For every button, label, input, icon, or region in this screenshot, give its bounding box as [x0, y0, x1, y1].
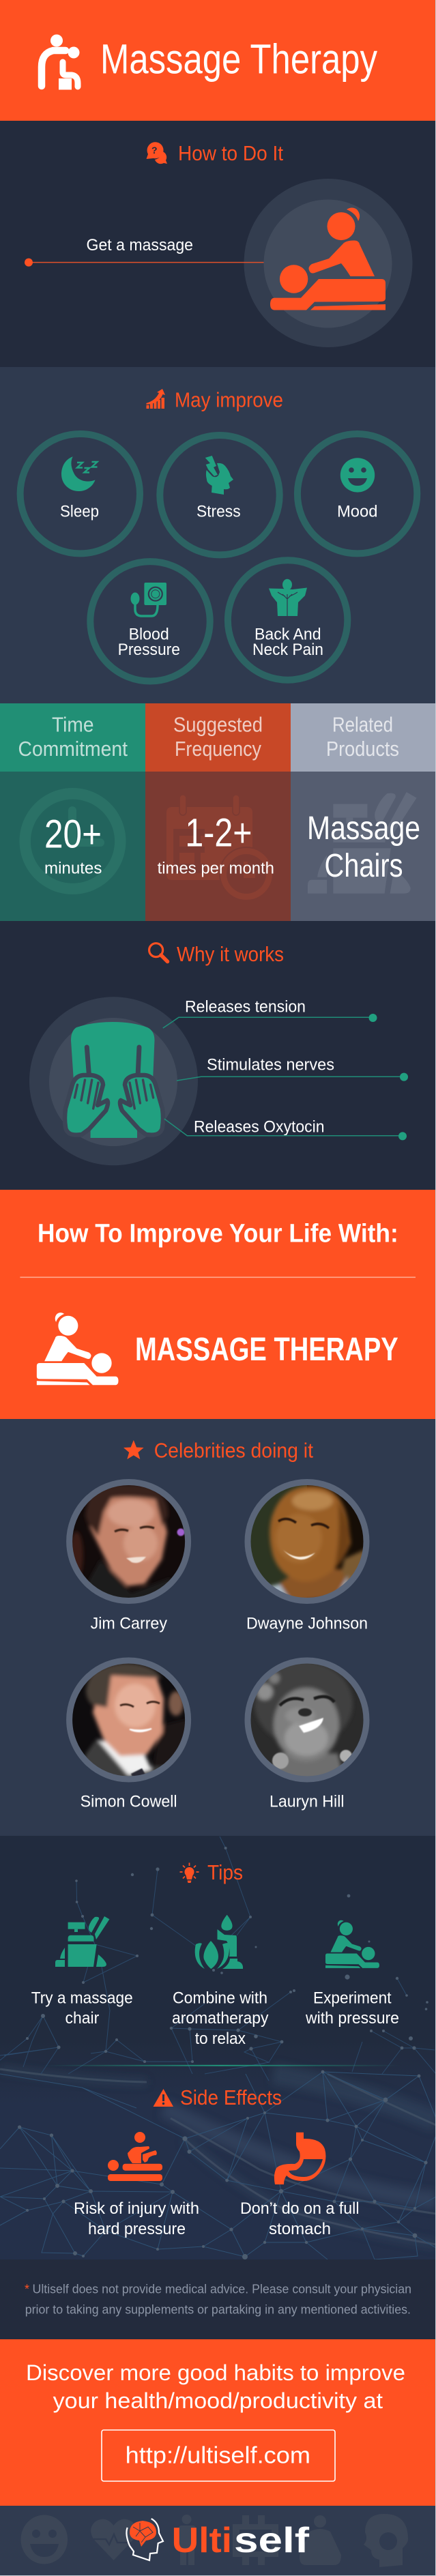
icon: massage white — [37, 1313, 119, 1385]
side effect: risk of injury: hard pressure — [88, 2220, 186, 2238]
heading: tips: Tips — [207, 1860, 243, 1884]
tip: experiment with pressure: with pressure — [305, 2009, 399, 2028]
title: Massage Therapy — [100, 35, 377, 82]
value: 20+ minutes — [44, 813, 102, 878]
value: 1-2+ times per month — [158, 811, 274, 878]
label: lauryn hill: Lauryn Hill — [270, 1793, 344, 1811]
panel: title banner — [0, 0, 436, 121]
portrait: jim carrey — [68, 1480, 191, 1603]
tip: combine with aromatherapy: to relax — [195, 2030, 246, 2048]
label: simon cowell: Simon Cowell — [81, 1793, 177, 1811]
tip: try a massage chair: chair — [66, 2009, 99, 2028]
value: 1-2+ times per month: times per month — [158, 860, 274, 878]
item: blood pressure: Pressure — [118, 641, 180, 659]
label: jim carrey: Jim Carrey — [91, 1615, 168, 1633]
icon: massage small — [325, 1920, 379, 1968]
item: blood pressure — [90, 561, 210, 681]
icon: star — [123, 1440, 144, 1459]
item: back and neck pain — [228, 560, 347, 680]
callout: get a massage: Get a massage — [86, 236, 193, 254]
panel: celebrities — [0, 1419, 436, 1836]
heading: side effects: Side Effects — [180, 2085, 282, 2109]
item: back and neck pain: Neck Pain — [252, 641, 323, 659]
logo: wordmark: Ulti — [172, 2521, 232, 2560]
icon: massage chair watermark — [308, 792, 417, 894]
panel: call to action — [0, 2339, 436, 2506]
icon: magnifier — [149, 943, 168, 962]
logo: wordmark: self — [234, 2521, 310, 2560]
link button — [102, 2430, 335, 2481]
icon: aromatherapy candle and lotus — [195, 1915, 243, 1969]
heading: celebrities doing it: Celebrities doing it — [154, 1438, 313, 1463]
tip: try a massage chair — [31, 1989, 133, 2028]
value: massage chairs: Massage — [307, 810, 420, 847]
panel: suggested frequency — [145, 703, 291, 921]
disclaimer text — [25, 2283, 411, 2317]
heading: related products — [326, 713, 399, 761]
link button: http://ultiself.com — [126, 2443, 310, 2469]
item: mood: Mood — [337, 503, 378, 521]
disclaimer text: * — [25, 2283, 29, 2296]
heading: time commitment: Time — [52, 713, 94, 737]
panel: tips and side effects — [0, 1836, 436, 2259]
tip: combine with aromatherapy: Combine with — [173, 1989, 267, 2008]
panel: how to improve your life banner — [0, 1190, 436, 1419]
item: blood pressure: Blood — [129, 625, 169, 643]
heading: may improve: May improve — [175, 388, 283, 412]
call to action text — [26, 2360, 405, 2413]
heading: suggested frequency: Suggested — [173, 713, 263, 737]
callout: get a massage — [25, 236, 263, 267]
portrait: lauryn hill — [246, 1658, 368, 1781]
side effect: risk of injury: Risk of injury with — [74, 2199, 199, 2218]
call to action text: Discover more good habits to improve — [26, 2360, 405, 2385]
panel: disclaimer — [0, 2259, 436, 2339]
callout: stimulates nerves: Stimulates nerves — [207, 1056, 334, 1074]
item: stress — [160, 435, 280, 555]
side effect: risk of injury — [74, 2199, 199, 2238]
heading: why it works: Why it works — [177, 942, 284, 966]
call to action text: your health/mood/productivity at — [53, 2388, 383, 2413]
disclaimer text: Ultiself does not provide medical advice. Please consult your physician — [33, 2283, 411, 2296]
tip: experiment with pressure — [305, 1989, 399, 2028]
tip: experiment with pressure: Experiment — [313, 1989, 392, 2008]
heading: time commitment — [18, 713, 128, 761]
item: mood — [297, 434, 417, 553]
value: 20+ minutes: minutes — [44, 860, 102, 878]
icon: massage chair — [55, 1916, 109, 1967]
panel: how to do it — [0, 121, 436, 367]
side effect: full stomach — [240, 2199, 359, 2238]
icon: warning triangle — [153, 2089, 173, 2107]
icon: question chat bubbles — [146, 142, 167, 164]
value: massage chairs: Chairs — [325, 848, 403, 884]
panel: related products — [291, 703, 436, 921]
label: dwayne johnson: Dwayne Johnson — [246, 1615, 368, 1633]
heading: related products: Products — [326, 737, 399, 761]
icon: person massaging seated client — [42, 34, 79, 90]
portrait: simon cowell — [68, 1658, 191, 1781]
item: sleep: Sleep — [60, 503, 99, 521]
side effect: full stomach: stomach — [269, 2220, 331, 2238]
side effect: full stomach: Don’t do on a full — [240, 2199, 359, 2218]
icon: calendar watermark — [166, 795, 273, 901]
value: massage chairs — [307, 810, 420, 884]
value: 1-2+ times per month: 1-2+ — [185, 811, 252, 855]
disclaimer text: prior to taking any supplements or partaking in any mentioned activities. — [25, 2303, 411, 2317]
heading: how to do it: How to Do It — [178, 141, 283, 165]
illustration: hands on back — [29, 997, 198, 1165]
panel: time commitment — [0, 703, 145, 921]
tip: combine with aromatherapy — [172, 1989, 269, 2048]
heading: suggested frequency: Frequency — [175, 737, 261, 761]
icon: rising chart — [146, 389, 165, 409]
illustration: masseuse in circles — [244, 179, 412, 347]
portrait: dwayne johnson — [246, 1480, 368, 1603]
heading: time commitment: Commitment — [18, 737, 128, 761]
logo: head with brain — [126, 2519, 163, 2560]
heading: related products: Related — [332, 713, 393, 737]
icon: light bulb — [180, 1862, 199, 1883]
icon: stomach — [274, 2133, 325, 2184]
icon: question chat bubbles: ? — [151, 145, 158, 156]
panel: footer — [0, 2506, 436, 2575]
tip: try a massage chair: Try a massage — [31, 1989, 133, 2008]
item: back and neck pain: Back And — [255, 625, 321, 643]
value: 20+ minutes: 20+ — [44, 813, 102, 857]
tip: combine with aromatherapy: aromatherapy — [172, 2009, 269, 2028]
icons: faint footer watermarks — [21, 2514, 408, 2567]
network background — [0, 1836, 436, 2259]
panel: why it works — [0, 921, 436, 1190]
callout: releases tension — [163, 997, 377, 1028]
icon: hard pressure massage — [108, 2132, 162, 2181]
item: stress: Stress — [197, 503, 241, 521]
heading: suggested frequency — [173, 713, 263, 761]
icon: clock watermark — [20, 788, 126, 894]
callout: stimulates nerves — [177, 1056, 408, 1081]
callout: releases tension: Releases tension — [185, 997, 306, 1016]
item: sleep — [20, 434, 140, 553]
callout: releases oxytocin — [164, 1117, 407, 1140]
callout: releases oxytocin: Releases Oxytocin — [194, 1117, 325, 1136]
logo: wordmark — [172, 2521, 310, 2560]
panel: may improve — [0, 367, 436, 703]
heading: how to improve your life with: How To Improve Your Life With: — [38, 1219, 398, 1248]
